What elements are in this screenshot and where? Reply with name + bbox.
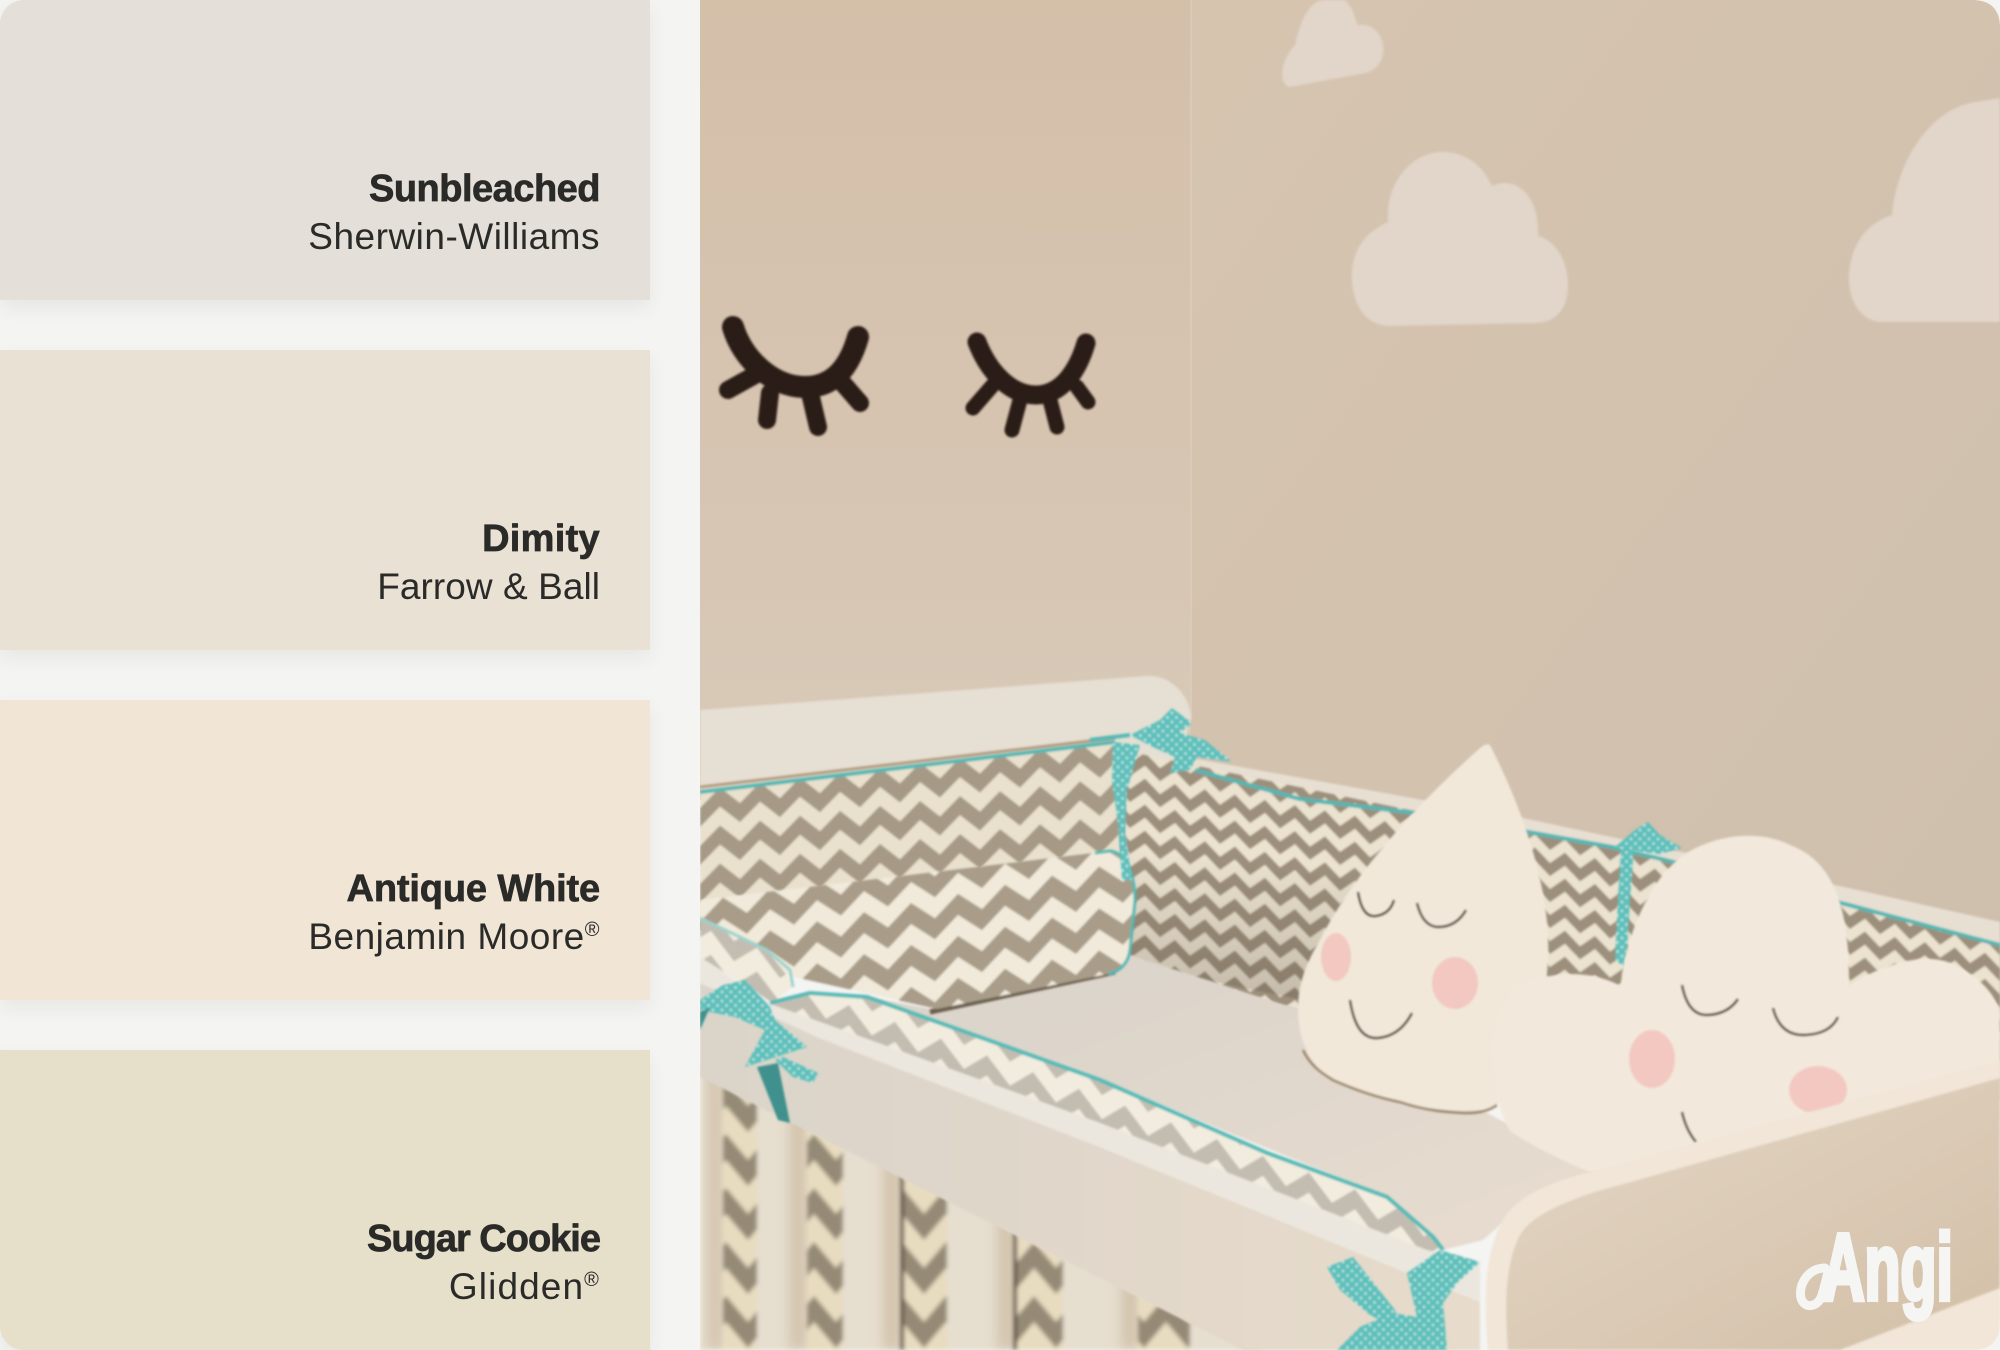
wall decal: left sleeping eyelash: [728, 327, 860, 427]
crib: back and side rails: [700, 676, 2000, 1040]
panel: Dimity swatch: [0, 350, 650, 650]
wall decal: clouds: [1282, 0, 2000, 326]
swatch brand: Benjamin Moore: Benjamin Moore®: [308, 916, 600, 957]
swatch brand: Glidden: Glidden®: [449, 1266, 600, 1307]
swatch brand: Farrow & Ball: Farrow & Ball: [377, 566, 600, 607]
wall background: [700, 0, 2000, 1100]
crib: mattress: [867, 955, 1620, 1250]
pillow: cloud with sleeping face: [1493, 836, 2000, 1172]
fabric ties: [700, 708, 1682, 1350]
wall decal: right sleeping eyelash: [973, 342, 1088, 430]
panel: Antique White swatch: [0, 700, 650, 1000]
crib slats with chevron bumper bands: [700, 1066, 1243, 1350]
panel: Sugar Cookie swatch: [0, 1050, 650, 1350]
swatch name: Dimity: Dimity: [482, 518, 600, 560]
swatch name: Sugar Cookie: Sugar Cookie: [367, 1218, 600, 1260]
pillow: raindrop with sleeping face: [1298, 744, 1548, 1113]
swatch name: Antique White: Antique White: [347, 868, 600, 910]
swatch brand: Sherwin-Williams: Sherwin-Williams: [308, 216, 600, 257]
crib: front rail with bumper strip: [700, 918, 1480, 1350]
bolster pillow: [700, 851, 1135, 1012]
photo: nursery crib scene: [700, 0, 2000, 1350]
logo: Angi: Angi: [1822, 1213, 1953, 1320]
swatch name: Sunbleached: Sunbleached: [369, 168, 600, 210]
crib: near end board: [1486, 1060, 2000, 1350]
panel: Sunbleached swatch: [0, 0, 650, 300]
